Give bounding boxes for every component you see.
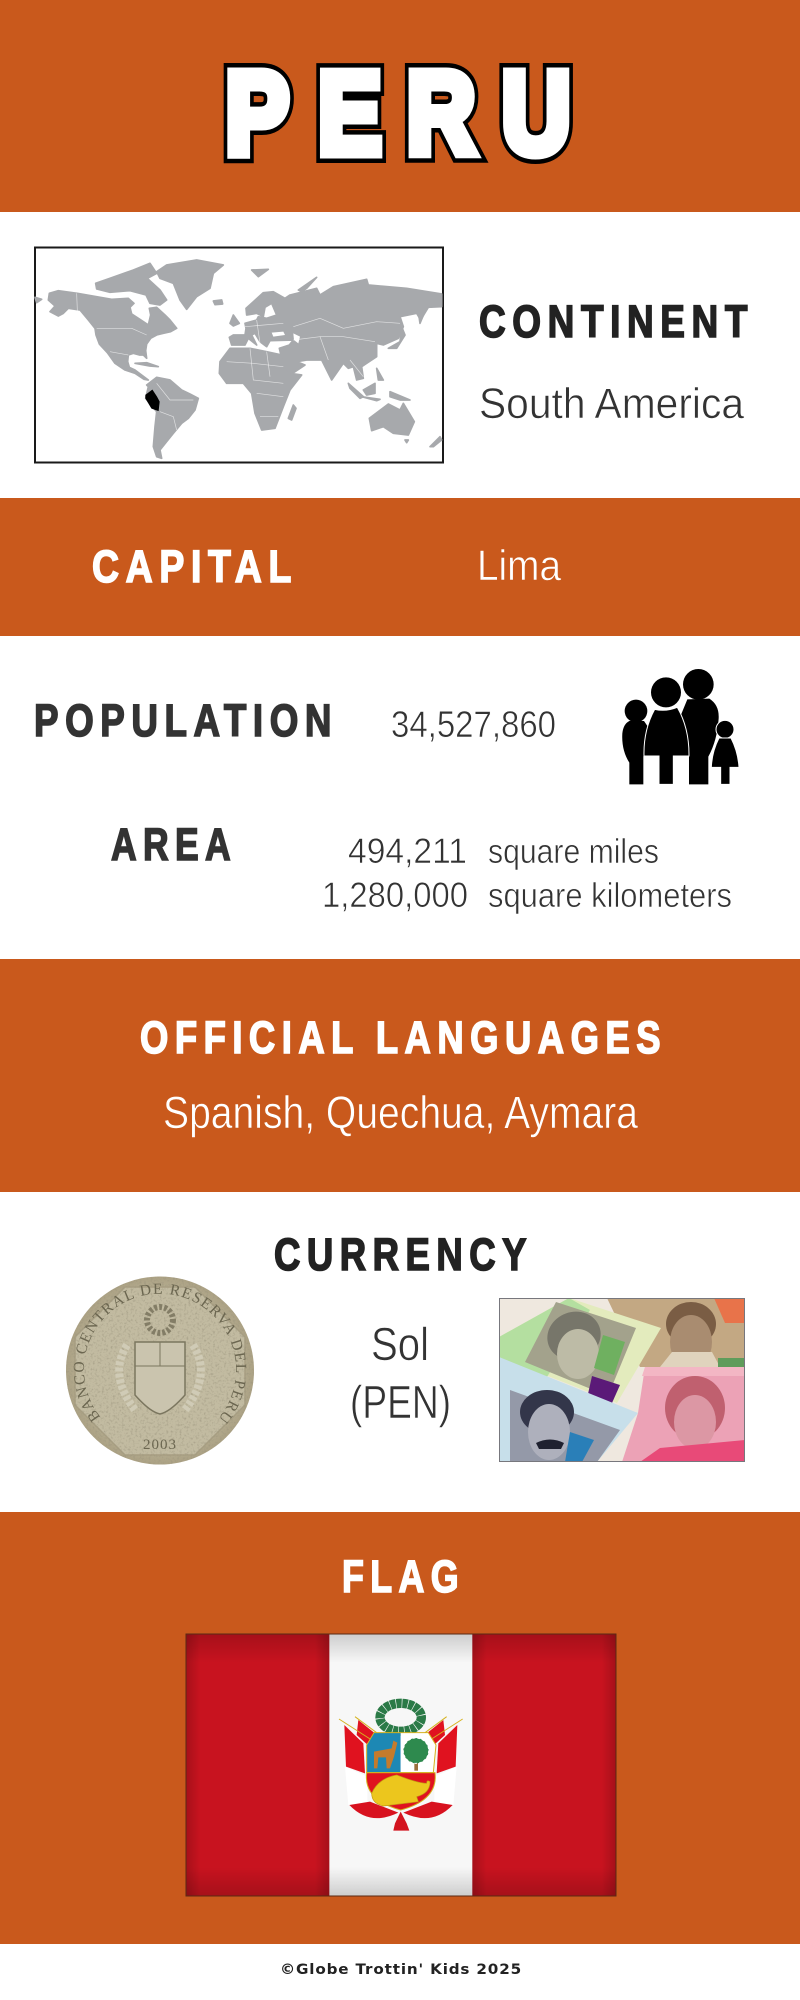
flag heading: FLAG [342,1551,465,1602]
panel: continent [35,248,754,462]
currency heading: CURRENCY [274,1229,533,1280]
area heading: AREA [111,819,237,870]
languages value: Spanish, Quechua, Aymara [163,1087,639,1138]
flag emblem: coat of arms [339,1703,463,1831]
area values: 1,280,000 [322,876,468,915]
area values: 494,211 [348,832,467,871]
currency name: Sol [371,1318,429,1370]
world map [35,248,443,462]
panel: official languages [0,959,800,1192]
panel: capital [0,498,800,636]
area values: square miles [488,833,659,871]
title: PERU [226,49,571,178]
panel: currency [66,1229,745,1464]
title: PERU [226,49,571,178]
languages heading: OFFICIAL LANGUAGES [140,1012,667,1063]
capital value: Lima [477,542,561,590]
icon: sol coin: BANCO CENTRAL DE RESERVA DEL PERU [74,1284,246,1424]
population heading: POPULATION [34,695,338,746]
area values [322,832,732,915]
panel: population and area [34,669,739,915]
continent value: South America [479,380,744,428]
currency name: (PEN) [350,1376,451,1428]
icon: banknotes [499,1298,745,1462]
population value: 34,527,860 [391,704,556,745]
flag of Peru [186,1634,616,1896]
footer credit: ©Globe Trottin' Kids 2025 [280,1962,522,1978]
panel: title banner [0,0,800,212]
currency name [350,1318,451,1428]
capital heading: CAPITAL [92,541,298,592]
panel: flag [0,1512,800,1944]
icon: family [622,669,739,784]
map highlight: Peru [146,390,159,411]
icon: sol coin: 2003 [143,1437,177,1453]
area values: square kilometers [488,877,732,915]
